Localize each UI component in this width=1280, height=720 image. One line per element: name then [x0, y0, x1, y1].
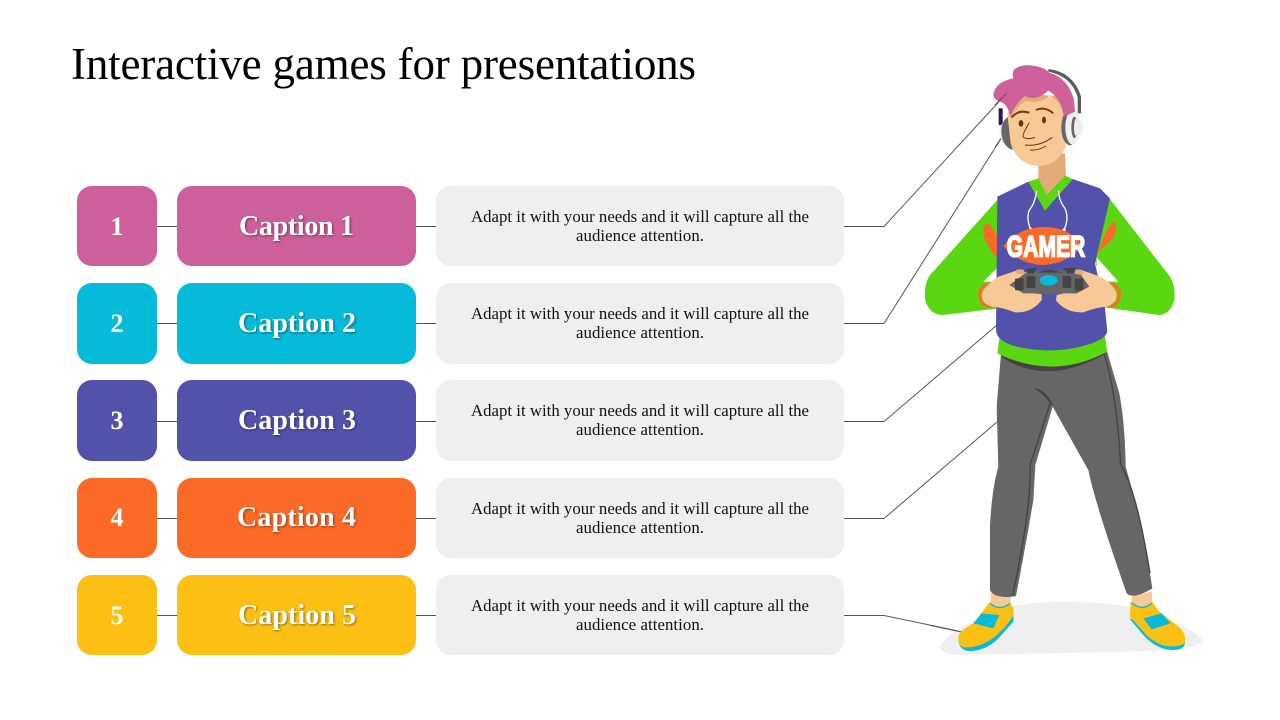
description 5: Adapt it with your needs and it will capture all the — [471, 596, 809, 615]
caption 5 — [177, 575, 416, 655]
caption 2: Caption 2 — [238, 308, 356, 339]
left shoe — [958, 593, 1013, 651]
number badge 3: 3 — [110, 406, 124, 435]
caption 1: Caption 1 — [239, 211, 354, 242]
description 1: Adapt it with your needs and it will capture all the — [471, 207, 809, 226]
description 3 — [436, 380, 844, 461]
description 4 — [436, 478, 844, 558]
title: Interactive games for presentations — [71, 39, 696, 89]
right sleeve — [1095, 198, 1175, 315]
row 2 — [77, 283, 844, 364]
number badge 5: 5 — [110, 601, 124, 630]
orange sleeve patches — [983, 223, 997, 259]
right hand — [1056, 271, 1117, 312]
collar — [1028, 176, 1073, 211]
number badge 4: 4 — [110, 503, 124, 532]
gamer figure illustration — [925, 65, 1203, 655]
neck — [1038, 153, 1066, 196]
caption 3: Caption 3 — [238, 405, 356, 436]
description 3: audience attention. — [576, 420, 704, 439]
caption 3 — [177, 380, 416, 461]
eyes — [1019, 120, 1023, 127]
connector lines from the rows to the gamer figure — [157, 94, 1006, 632]
description 4: audience attention. — [576, 518, 704, 537]
ground shadow — [940, 602, 1203, 655]
head — [993, 65, 1083, 166]
description 5 — [436, 575, 844, 655]
hair — [993, 65, 1075, 117]
left headphone back — [999, 108, 1003, 125]
lower body: shadow, legs, shoes — [930, 350, 1203, 655]
description 2 — [436, 283, 844, 364]
line end over shadow — [930, 625, 963, 632]
number badge 3 — [77, 380, 157, 461]
row 4 — [77, 478, 844, 558]
earphone cords — [1028, 191, 1067, 231]
left cuff — [980, 284, 991, 307]
description 5: audience attention. — [576, 615, 704, 634]
right headphone — [1061, 109, 1083, 145]
row 5 — [77, 575, 844, 655]
caption 4: Caption 4 — [237, 502, 356, 533]
sweater hem — [997, 337, 1107, 367]
left hand — [982, 271, 1042, 312]
game controller — [1009, 267, 1089, 294]
nose and mouth — [1023, 123, 1052, 150]
eyebrows — [1012, 109, 1053, 117]
description 1 — [436, 186, 844, 266]
trousers — [990, 350, 1152, 597]
headband — [1048, 71, 1079, 113]
number badge 1 — [77, 186, 157, 266]
number badge 1: 1 — [110, 212, 124, 241]
number badge 5 — [77, 575, 157, 655]
gamer badge: GAMER — [1007, 231, 1086, 264]
number badge 4 — [77, 478, 157, 558]
vest — [996, 179, 1110, 350]
caption 5: Caption 5 — [238, 600, 356, 631]
caption 2 — [177, 283, 416, 364]
right cuff — [1108, 284, 1120, 307]
right shoe — [1129, 592, 1185, 650]
description 2: Adapt it with your needs and it will capture all the — [471, 304, 809, 323]
number badge 2 — [77, 283, 157, 364]
description 2: audience attention. — [576, 323, 704, 342]
row 3 — [77, 380, 844, 461]
caption 4 — [177, 478, 416, 558]
description 4: Adapt it with your needs and it will capture all the — [471, 499, 809, 518]
thumbs — [1016, 269, 1083, 275]
caption 1 — [177, 186, 416, 266]
description 3: Adapt it with your needs and it will capture all the — [471, 401, 809, 420]
face — [1007, 92, 1066, 166]
left sleeve — [925, 200, 1000, 315]
number badge 2: 2 — [110, 309, 124, 338]
row 1 — [77, 186, 844, 266]
upper body: arms, vest, head — [925, 65, 1175, 367]
line ends over head — [995, 93, 1007, 147]
gamer badge — [1003, 227, 1086, 265]
description 1: audience attention. — [576, 226, 704, 245]
white arm gaps — [983, 268, 997, 282]
